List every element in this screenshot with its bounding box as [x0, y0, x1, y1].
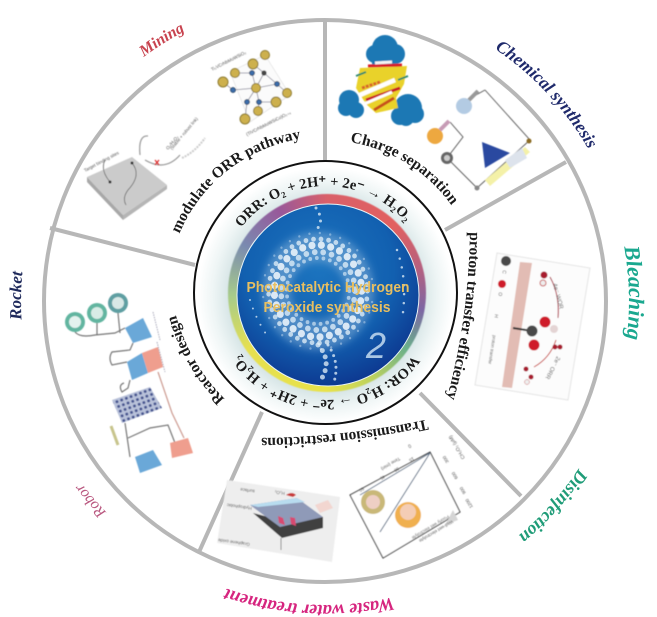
- illustration: H2O2 production chart: 1200: [464, 497, 474, 509]
- illustration: substrate slab with ORR pathway: [83, 116, 205, 220]
- illustration: H2O2 production chart: Well-wet electrolyte: [418, 519, 454, 544]
- center title: Photocatalytic Hydrogen: [246, 279, 410, 296]
- subscript 2 of O2: 2: [365, 325, 386, 366]
- illustration: high entropy crystal structure: Ti₂VCrNbMoWSiO₂: [210, 50, 247, 72]
- inner disk with black outline: [193, 160, 458, 425]
- illustration: graphene membrane: Graphene oxide: [217, 537, 250, 547]
- illustration: H2O2 production chart: 900: [458, 486, 467, 495]
- application: Bleaching: Bleaching: [622, 246, 644, 340]
- sector dividers: [50, 20, 566, 552]
- illustration: proton transfer panel: 4e⁻ WOR: [551, 283, 564, 310]
- illustration: proton transfer panel: O: [496, 292, 503, 297]
- ORR equation: ORR: O₂ + 2H⁺ + 2e⁻ → H₂O₂: [236, 176, 408, 226]
- illustration: graphene membrane: H₂O₂: [274, 490, 285, 496]
- illustration: H2O2 production chart: 60: [358, 486, 365, 493]
- illustration: proton transfer panel: H: [492, 314, 499, 319]
- illustration: H2O2 production chart: 300: [441, 455, 450, 464]
- illustration: high entropy crystal structure: (TiVCrNbMoWSiCo)O₂₊ₓ: [245, 110, 292, 137]
- label: modulate ORR pathway: modulate ORR pathway: [173, 132, 300, 234]
- illustration: H2O2 production chart: 15: [408, 456, 415, 463]
- label: proton transfer efficiency: proton transfer efficiency: [445, 232, 478, 400]
- illustration: graphene membrane: surface: [239, 487, 255, 494]
- illustration: H2O2 production chart: CH₂O₂ (μM): [448, 434, 467, 460]
- illustration: substrate slab with ORR pathway: O₂/H₂O₂: [165, 134, 180, 151]
- illustration: substrate slab with ORR pathway: (stable + robust link): [169, 116, 199, 151]
- application: Rocket: Rocket: [9, 270, 22, 320]
- label: Charge separation: Charge separation: [352, 133, 456, 206]
- illustration: H2O2 production chart: 600: [450, 471, 459, 480]
- rising bubble trails: [250, 208, 404, 382]
- illustration: H2O2 production chart: 0: [406, 442, 412, 449]
- illustration: reactor process flow: [65, 293, 193, 473]
- application: Robor: Robor: [76, 486, 106, 518]
- illustration: graphene membrane: [217, 480, 340, 562]
- outer wheel ring: [44, 20, 606, 582]
- central blue water disc: [237, 204, 419, 386]
- illustration: proton transfer panel: proton transfer: [487, 335, 497, 365]
- label: Transmission restrictions: Transmission restrictions: [262, 420, 429, 448]
- illustration: H2O2 production chart: Poorly wet electrolyte: [410, 514, 450, 541]
- illustration: anthraquinone flow reactor: [427, 90, 532, 190]
- illustration: substrate slab with ORR pathway: Target binding sites: [83, 150, 120, 173]
- label: Reactor design: Reactor design: [170, 315, 224, 406]
- center title: [246, 279, 410, 316]
- illustration: proton transfer panel: 2e⁻ ORR: [543, 355, 561, 380]
- illustration: H2O2 production chart: 45: [379, 474, 386, 481]
- application: Chemical synthesis: Chemical synthesis: [496, 42, 595, 148]
- illustration: high entropy crystal structure: [210, 50, 292, 137]
- application: Disinfection: Disinfection: [518, 468, 588, 541]
- application: Mining: Mining: [139, 25, 184, 57]
- bubble ring forming O: [263, 233, 373, 349]
- WOR equation: WOR: H₂O → 2e⁻ + 2H⁺ + H₂O₂: [236, 354, 420, 410]
- center title: Peroxide synthesis: [264, 299, 390, 316]
- illustration: proton transfer panel: [475, 253, 590, 400]
- illustration: proton transfer panel: C: [500, 270, 507, 275]
- illustration: graphene membrane: Hydrophobic: [226, 502, 252, 511]
- illustration: H2O2 production chart: [350, 434, 474, 558]
- illustration: H2O2 production chart: 30: [393, 466, 400, 473]
- illustration: H2O2 production chart: Time (min): [380, 456, 401, 472]
- colour gradient ring: [228, 194, 426, 392]
- illustration: protein structure: [338, 35, 424, 126]
